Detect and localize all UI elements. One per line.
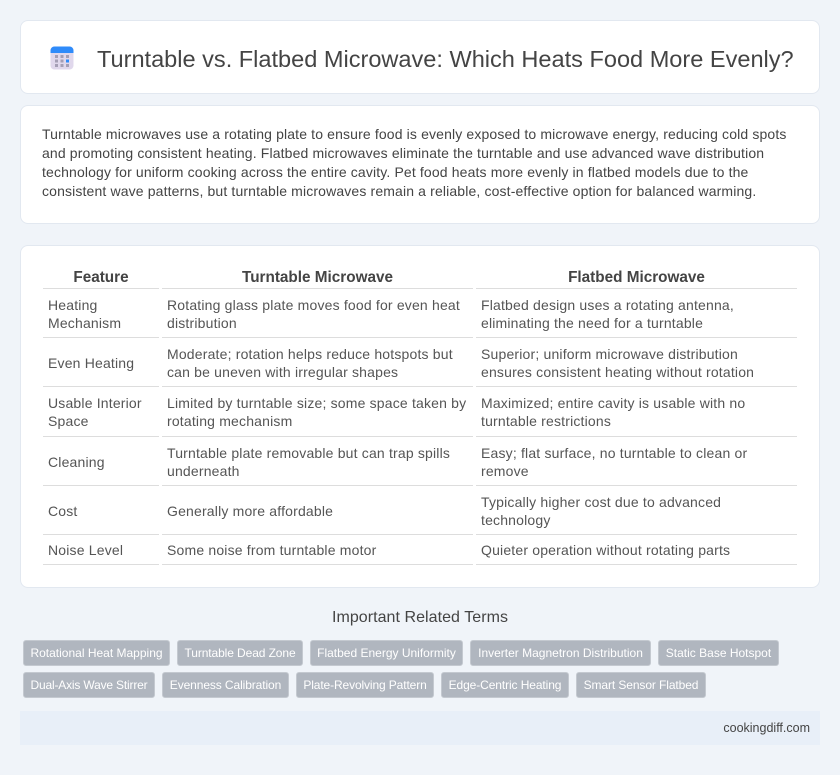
related terms tags: Smart Sensor Flatbed: [584, 678, 698, 692]
row: even heating: ensures consistent heating without rotation: [481, 364, 754, 380]
row: cost: [48, 494, 721, 528]
row: cleaning: remove: [481, 463, 529, 479]
header card: [20, 20, 820, 94]
icon: calendar: [50, 46, 74, 70]
row: heating mechanism: Mechanism: [48, 315, 121, 331]
table header: [73, 269, 705, 286]
title: Turntable vs. Flatbed Microwave: Which Heats Food More Evenly?: [97, 46, 794, 72]
row: heating mechanism: Rotating glass plate moves food for even heat: [167, 297, 460, 313]
row: cleaning: Cleaning: [48, 454, 105, 470]
intro panel: [20, 105, 820, 224]
row: cleaning: Easy; flat surface, no turntable to clean or: [481, 445, 747, 461]
row: heating mechanism: eliminating the need for a turntable: [481, 315, 703, 331]
row: even heating: Moderate; rotation helps reduce hotspots but: [167, 346, 453, 362]
table header: Feature: [73, 269, 129, 286]
row: heating mechanism: Heating: [48, 297, 98, 313]
row: cleaning: [48, 445, 747, 479]
row: usable interior space: Maximized; entire cavity is usable with no: [481, 395, 745, 411]
row: usable interior space: Space: [48, 413, 89, 429]
row: cleaning: underneath: [167, 463, 240, 479]
row: even heating: [48, 346, 754, 380]
table header: Turntable Microwave: [242, 269, 393, 286]
related terms tags: Dual-Axis Wave Stirrer: [31, 678, 147, 692]
intro text: and promoting consistent heating. Flatbed microwaves eliminate the turntable and use advanced wave distribution: [42, 145, 764, 161]
related terms tags: Plate-Revolving Pattern: [303, 678, 427, 692]
related terms tags: Turntable Dead Zone: [184, 646, 296, 660]
related terms tags: Flatbed Energy Uniformity: [317, 646, 456, 660]
related terms tags: Static Base Hotspot: [666, 646, 771, 660]
row: usable interior space: Usable Interior: [48, 395, 142, 411]
related terms tags: Inverter Magnetron Distribution: [478, 646, 643, 660]
intro text: Turntable microwaves use a rotating plate to ensure food is evenly exposed to microwave energy, reducing cold spots: [42, 126, 786, 142]
row: usable interior space: [48, 395, 745, 429]
table header: Flatbed Microwave: [568, 269, 705, 286]
intro text: [42, 126, 786, 199]
intro text: consistent wave patterns, but turntable microwaves remain a reliable, cost-effective option for balanced warming.: [42, 183, 756, 199]
row: cost: technology: [481, 512, 551, 528]
comparison table: [43, 269, 797, 565]
row: noise level: Some noise from turntable motor: [167, 542, 376, 558]
intro text: technology for uniform cooking across the entire cavity. Pet food heats more evenly in flatbed models due to the: [42, 164, 748, 180]
related terms tags: Evenness Calibration: [170, 678, 281, 692]
row: cleaning: Turntable plate removable but can trap spills: [167, 445, 450, 461]
related terms tags: [23, 640, 779, 698]
row: usable interior space: Limited by turntable size; some space taken by: [167, 395, 466, 411]
row: heating mechanism: [48, 297, 734, 331]
row: usable interior space: turntable restrictions: [481, 413, 611, 429]
footer source: cookingdiff.com: [723, 721, 810, 735]
row: heating mechanism: distribution: [167, 315, 237, 331]
row: noise level: Quieter operation without rotating parts: [481, 542, 730, 558]
row: even heating: Superior; uniform microwave distribution: [481, 346, 738, 362]
row: heating mechanism: Flatbed design uses a rotating antenna,: [481, 297, 734, 313]
related terms heading: Important Related Terms: [332, 609, 508, 626]
row: cost: Generally more affordable: [167, 503, 333, 519]
related terms tags: Rotational Heat Mapping: [30, 646, 163, 660]
row: even heating: Even Heating: [48, 355, 134, 371]
row: cost: Typically higher cost due to advanced: [481, 494, 721, 510]
comparison table panel: [20, 245, 820, 588]
related terms tags: Edge-Centric Heating: [449, 678, 561, 692]
footer bar: [20, 711, 820, 745]
row: usable interior space: rotating mechanism: [167, 413, 292, 429]
row: even heating: can be uneven with irregular shapes: [167, 364, 398, 380]
row: cost: Cost: [48, 503, 78, 519]
row: noise level: [48, 542, 730, 558]
row: noise level: Noise Level: [48, 542, 123, 558]
